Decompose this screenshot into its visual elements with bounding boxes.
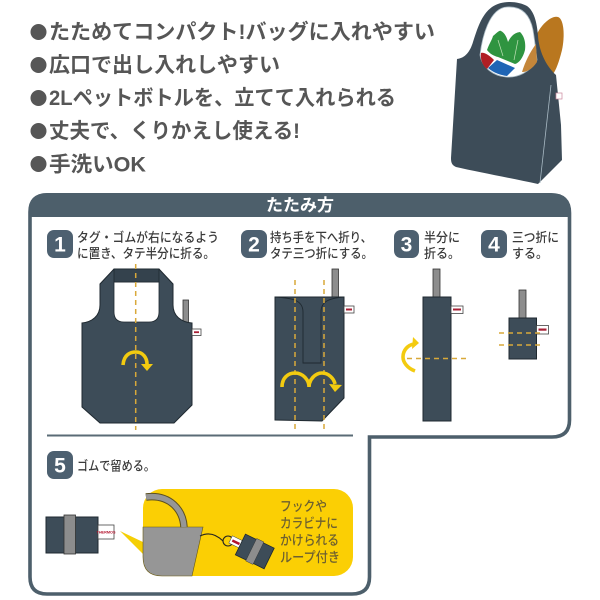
mini tag bbox=[229, 536, 243, 548]
panel header bar bbox=[29, 193, 571, 217]
fold line bbox=[135, 264, 137, 430]
fold lines bbox=[499, 333, 543, 345]
badge 3: 3 bbox=[401, 234, 412, 256]
divider bbox=[47, 434, 353, 436]
fold line bbox=[407, 358, 466, 360]
badge 2: 2 bbox=[248, 234, 260, 256]
panel heading: たたみ方 bbox=[266, 195, 334, 215]
step 2 text bbox=[270, 230, 373, 261]
callout text: ループ付き bbox=[280, 550, 340, 565]
step 5 bbox=[46, 451, 353, 576]
step 2 text: タテ三つ折にする。 bbox=[270, 246, 373, 261]
illustration: tote bag with groceries bbox=[451, 2, 564, 184]
feature list bbox=[30, 20, 435, 176]
bag opening bbox=[480, 7, 537, 77]
step 4 text: する。 bbox=[512, 246, 548, 261]
folded bag bbox=[509, 318, 536, 359]
handle slot bbox=[275, 297, 344, 363]
callout text: フックや bbox=[280, 499, 327, 514]
feature: wide opening: 広口で出し入れしやすい bbox=[49, 54, 280, 77]
bag body bbox=[451, 2, 562, 184]
callout: loop detail bbox=[143, 489, 353, 576]
leafy greens bbox=[487, 31, 525, 64]
callout pointer bbox=[120, 531, 145, 556]
bag seam bbox=[540, 85, 551, 183]
tag bbox=[192, 329, 201, 336]
loop cord bbox=[200, 534, 223, 541]
bag shape bbox=[82, 269, 192, 423]
callout text: カラビナに bbox=[280, 516, 338, 531]
handle band bbox=[114, 269, 159, 282]
badge 3 bbox=[394, 230, 419, 258]
folded pack: THERMOS bbox=[96, 530, 116, 534]
fold arrow bbox=[123, 352, 153, 371]
tag bbox=[451, 306, 463, 314]
feature: hand wash: 手洗いOK bbox=[49, 154, 146, 176]
folded bag bbox=[275, 297, 344, 421]
badge 1: 1 bbox=[54, 234, 66, 256]
ring bbox=[223, 536, 233, 546]
badge 4: 4 bbox=[488, 234, 500, 256]
bag tag bbox=[556, 93, 562, 99]
rubber band bbox=[183, 300, 188, 323]
panel frame bbox=[30, 195, 570, 594]
step 1 bbox=[47, 230, 219, 430]
step 1 text: に置き、タテ半分に折る。 bbox=[77, 246, 215, 261]
fold arrow bbox=[282, 373, 342, 392]
rubber band bbox=[519, 290, 526, 318]
badge 5: 5 bbox=[54, 454, 66, 478]
step 4 text bbox=[512, 230, 559, 261]
tag bbox=[344, 306, 354, 313]
step 4 bbox=[481, 230, 559, 359]
badge 1 bbox=[47, 230, 73, 258]
fold arrow bbox=[403, 337, 419, 371]
folded bag bbox=[423, 297, 451, 421]
feature: durable: 丈夫で、くりかえし使える! bbox=[49, 120, 300, 143]
step 3 text: 半分に bbox=[424, 230, 460, 245]
bag handle opening bbox=[114, 282, 159, 322]
baguette behind opening bbox=[522, 44, 537, 72]
tomato box bbox=[481, 53, 494, 69]
step 2 bbox=[241, 230, 373, 430]
mini pack bbox=[235, 533, 275, 570]
feature: 2L bottle: 2Lペットボトルを、立てて入れられる bbox=[49, 87, 396, 110]
step 3 bbox=[394, 230, 466, 421]
gray bag bbox=[143, 527, 203, 576]
step 5 text: ゴムで留める。 bbox=[77, 458, 155, 474]
badge 2 bbox=[241, 230, 267, 258]
bread bbox=[534, 17, 564, 74]
tag bbox=[536, 326, 548, 334]
step 4 text: 三つ折に bbox=[512, 230, 559, 245]
step 3 text bbox=[424, 230, 460, 261]
fold lines bbox=[295, 280, 324, 430]
callout text: かけられる bbox=[280, 533, 339, 548]
step 3 text: 折る。 bbox=[424, 246, 460, 261]
step 1 text bbox=[77, 230, 219, 261]
callout text bbox=[280, 499, 340, 565]
rubber band bbox=[433, 269, 440, 297]
gray bag handle bbox=[146, 497, 184, 527]
folded pack bbox=[46, 515, 116, 554]
rubber band bbox=[332, 269, 338, 297]
callout background bbox=[143, 489, 353, 576]
step 2 text: 持ち手を下へ折り、 bbox=[270, 230, 372, 245]
step 1 text: タグ・ゴムが右になるよう bbox=[77, 230, 219, 245]
badge 5 bbox=[47, 451, 73, 479]
panel: folding instructions bbox=[29, 193, 571, 594]
feature: compact: たためてコンパクト!バッグに入れやすい bbox=[49, 20, 435, 44]
blue carton bbox=[488, 60, 515, 76]
